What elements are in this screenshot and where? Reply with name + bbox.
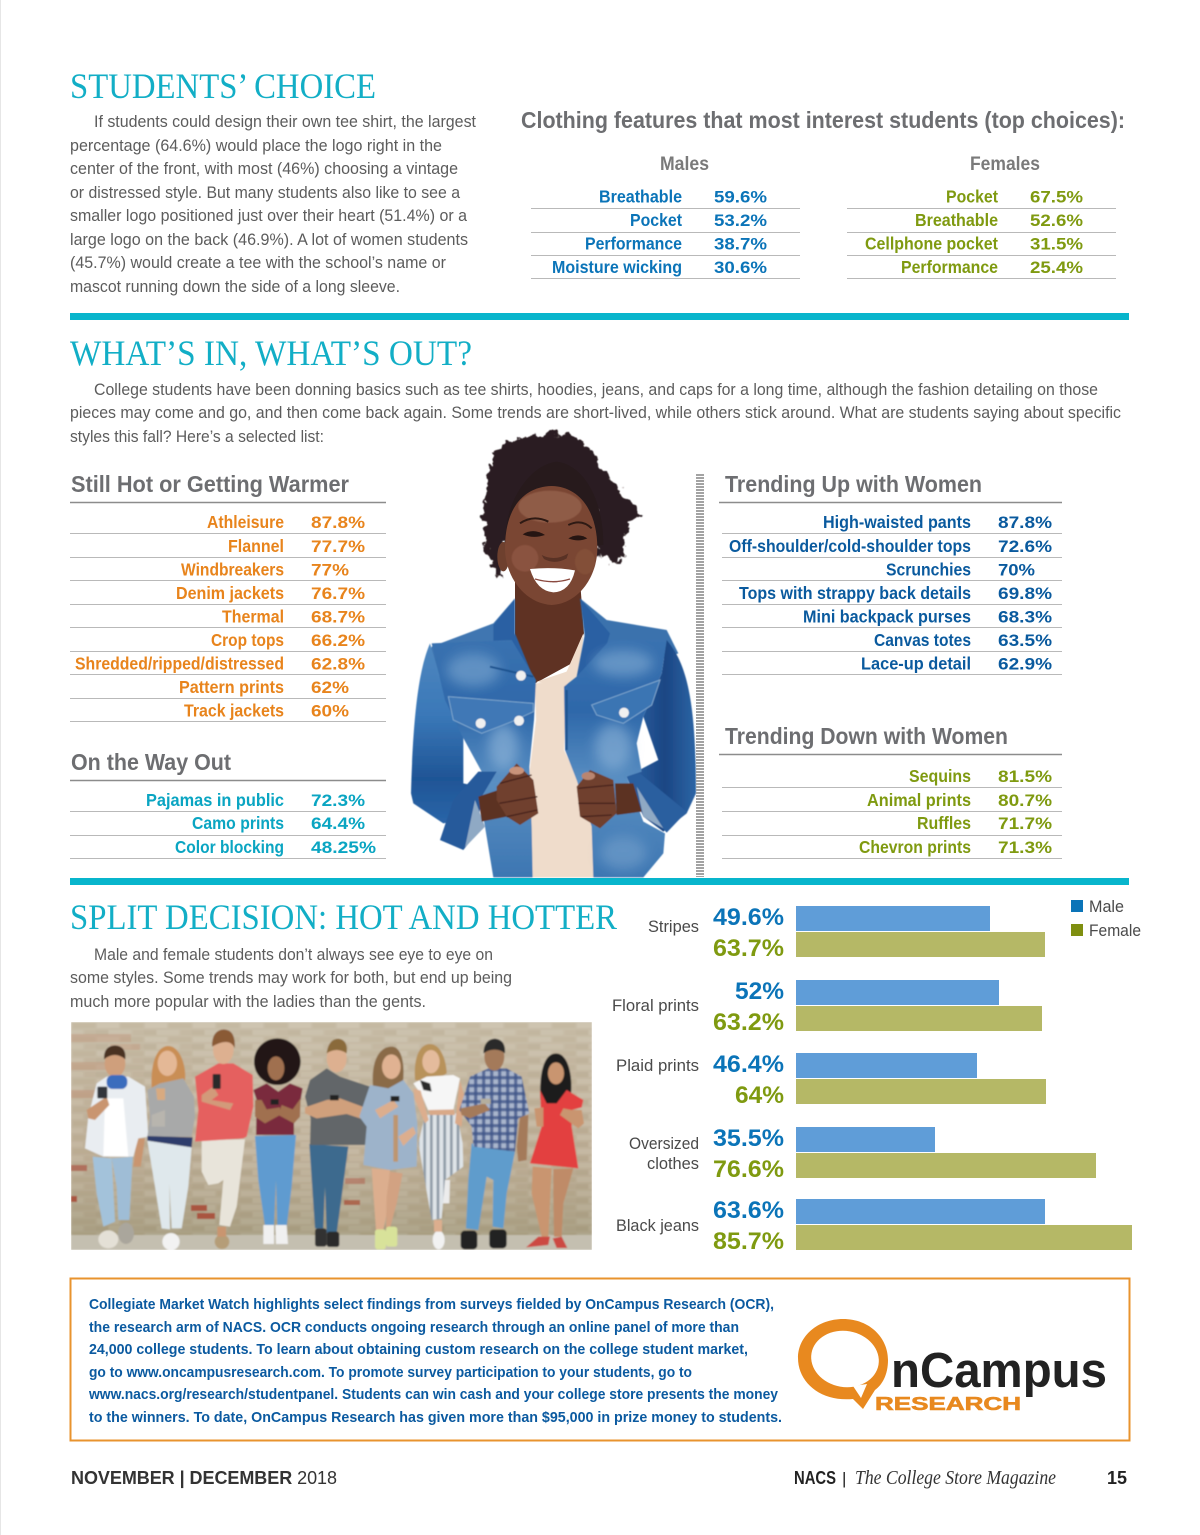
table: females: Females bbox=[970, 154, 1040, 175]
panel: students' choice bbox=[70, 66, 1125, 296]
table: still hot or getting warmer: Denim jackets bbox=[176, 583, 284, 603]
table: trending up with women: Canvas totes bbox=[874, 630, 971, 650]
table: females bbox=[847, 154, 1116, 278]
table: still hot or getting warmer: 77.7% bbox=[311, 537, 365, 556]
table: trending up with women: Tops with strappy back details bbox=[739, 583, 971, 603]
shirt bbox=[529, 660, 594, 877]
heading: split decision: SPLIT DECISION: HOT AND HOTTER bbox=[70, 897, 617, 937]
table: males: Moisture wicking bbox=[552, 257, 682, 277]
text block: trends intro: College students have been donning basics such as tee shirts, hoodies, jeans, and caps for a long time, although the fashion detailing on those bbox=[94, 381, 1098, 399]
table: still hot or getting warmer bbox=[70, 471, 386, 722]
table: on the way out: 72.3% bbox=[311, 791, 365, 810]
row: stripes: 49.6% bbox=[713, 904, 784, 931]
text block: students' choice intro: If students could design their own tee shirt, the largest bbox=[94, 113, 476, 131]
table: on the way out bbox=[70, 749, 386, 858]
row: oversized clothes: 35.5% bbox=[713, 1125, 784, 1152]
table: trending down with women: Animal prints bbox=[867, 790, 971, 810]
cuffs bbox=[440, 772, 497, 850]
table: males: Performance bbox=[585, 234, 682, 254]
table: trending up with women: Off-shoulder/cold-shoulder tops bbox=[729, 536, 971, 556]
table: trending up with women: Scrunchies bbox=[886, 560, 971, 580]
table: on the way out: Camo prints bbox=[192, 813, 284, 833]
row: floral prints bbox=[612, 978, 1042, 1036]
text block: split decision intro: much more popular with the ladies than the gents. bbox=[70, 993, 426, 1011]
table: females: Performance bbox=[901, 257, 998, 277]
logo: oncampus research: RESEARCH bbox=[875, 1394, 1021, 1414]
table: still hot or getting warmer: Track jackets bbox=[184, 700, 284, 720]
person 2 bbox=[147, 1141, 192, 1229]
striped vertical divider bbox=[696, 473, 704, 877]
row: floral prints: 52% bbox=[735, 978, 784, 1005]
footer: publication name: The College Store Magazine bbox=[855, 1467, 1056, 1489]
table: still hot or getting warmer: 62.8% bbox=[311, 654, 365, 674]
row: plaid prints: Plaid prints bbox=[616, 1057, 699, 1075]
table: still hot or getting warmer: 60% bbox=[311, 702, 349, 720]
text block: trends intro bbox=[70, 381, 1121, 446]
person 9 bbox=[532, 1167, 552, 1237]
logo: oncampus research: nCampus bbox=[891, 1344, 1107, 1398]
text block: about the survey: to the winners. To date, OnCampus Research has given more than $95,000 in prize money to students. bbox=[89, 1409, 782, 1426]
panel: what's in, what's out bbox=[70, 333, 1121, 877]
table: on the way out: Pajamas in public bbox=[146, 790, 284, 810]
bar chart: male vs female styles bbox=[612, 898, 1141, 1255]
text block: students' choice intro: (45.7%) would create a tee with the school’s name or bbox=[70, 254, 446, 272]
table: trending down with women: 80.7% bbox=[998, 791, 1052, 810]
table: females: 31.5% bbox=[1030, 234, 1083, 254]
text block: students' choice intro: smaller logo positioned just over their heart (51.4%) or a bbox=[70, 207, 468, 225]
table: still hot or getting warmer: Athleisure bbox=[207, 512, 284, 532]
right jacket body bbox=[564, 640, 667, 877]
text block: students' choice intro bbox=[70, 113, 476, 296]
table: males bbox=[531, 154, 800, 278]
table: males: 38.7% bbox=[714, 234, 767, 254]
row: black jeans: 85.7% bbox=[713, 1228, 784, 1255]
heading: clothing features: Clothing features that most interest students (top choices): bbox=[521, 107, 1125, 133]
table: trending up with women bbox=[719, 471, 1062, 674]
table: trending down with women: 71.3% bbox=[998, 838, 1052, 857]
table: still hot or getting warmer: Crop tops bbox=[211, 630, 284, 650]
table: still hot or getting warmer: 62% bbox=[311, 678, 349, 697]
table: males: 53.2% bbox=[714, 211, 767, 230]
text block: split decision intro: Male and female students don’t always see eye to eye on bbox=[94, 946, 493, 964]
table: on the way out: Color blocking bbox=[175, 837, 284, 857]
person 3 bbox=[202, 1139, 245, 1227]
left sleeve bbox=[411, 643, 478, 823]
row: floral prints: Floral prints bbox=[612, 997, 699, 1015]
text block: trends intro: styles this fall? Here’s a selected list: bbox=[70, 428, 324, 446]
person 4 bbox=[255, 1135, 296, 1227]
text block: trends intro: pieces may come and go, and then come back again. Some trends are short-lived, while others stick around. What are students saying about specific bbox=[70, 404, 1121, 422]
row: plaid prints bbox=[616, 1051, 1046, 1109]
text block: about the survey: www.nacs.org/research/studentpanel. Students can win cash and your college store presents the money bbox=[88, 1386, 779, 1403]
table: still hot or getting warmer: 76.7% bbox=[311, 584, 365, 603]
text block: about the survey: the research arm of NACS. OCR conducts ongoing research through an online panel of more than bbox=[89, 1319, 739, 1336]
table: still hot or getting warmer: Thermal bbox=[222, 606, 284, 626]
table: still hot or getting warmer: Shredded/ripped/distressed bbox=[75, 654, 284, 674]
table: trending up with women: 87.8% bbox=[998, 513, 1052, 532]
person 6 bbox=[372, 1168, 390, 1230]
row: black jeans: Black jeans bbox=[616, 1217, 699, 1235]
text block: about the survey: go to www.oncampusresearch.com. To promote survey participation to your students, go to bbox=[89, 1364, 692, 1381]
text block: students' choice intro: mascot running down the side of a long sleeve. bbox=[70, 278, 400, 296]
table: males: Breathable bbox=[599, 186, 682, 206]
text block: about the survey bbox=[88, 1296, 782, 1426]
face bbox=[497, 542, 509, 571]
footer: issue date: NOVEMBER | DECEMBER 2018 bbox=[71, 1468, 337, 1488]
table: trending down with women: 81.5% bbox=[998, 767, 1052, 786]
text block: split decision intro bbox=[70, 946, 512, 1011]
table: females: 52.6% bbox=[1030, 211, 1083, 230]
table: still hot or getting warmer: 68.7% bbox=[311, 608, 365, 626]
row: plaid prints: 64% bbox=[735, 1082, 784, 1109]
text block: students' choice intro: center of the front, with most (46%) choosing a vintage bbox=[70, 160, 458, 178]
text block: students' choice intro: large logo on the back (46.9%). A lot of women students bbox=[70, 231, 468, 249]
footer: publication name: NACS bbox=[794, 1468, 836, 1488]
right sleeve bbox=[627, 640, 696, 832]
left jacket body bbox=[432, 640, 536, 877]
buttons bbox=[516, 671, 526, 681]
footer bbox=[71, 1467, 1127, 1489]
text block: students' choice intro: or distressed style. But many students also like to see a bbox=[70, 184, 461, 202]
row: black jeans: 63.6% bbox=[713, 1197, 784, 1224]
table: on the way out: 64.4% bbox=[311, 814, 365, 833]
hands bbox=[478, 790, 507, 822]
panel: split decision bbox=[70, 897, 1141, 1255]
table: females: Pocket bbox=[946, 186, 998, 206]
table: on the way out: On the Way Out bbox=[71, 749, 231, 775]
row: stripes bbox=[648, 904, 1045, 962]
row: stripes: 63.7% bbox=[713, 935, 784, 962]
table: trending up with women: Trending Up with Women bbox=[725, 471, 982, 497]
table: trending up with women: 63.5% bbox=[998, 631, 1052, 650]
table: trending up with women: 70% bbox=[998, 560, 1035, 580]
table: females: Cellphone pocket bbox=[865, 234, 998, 254]
callout: oncampus research note bbox=[70, 1278, 1130, 1440]
table: trending up with women: 72.6% bbox=[998, 537, 1052, 556]
text block: split decision intro: some styles. Some trends may work for both, but end up being bbox=[70, 969, 512, 987]
row: black jeans bbox=[616, 1197, 1132, 1255]
table: males: 30.6% bbox=[714, 258, 767, 277]
text block: about the survey: 24,000 college students. To learn about obtaining custom research on the college student market, bbox=[89, 1341, 748, 1358]
table: trending down with women: Sequins bbox=[909, 766, 971, 786]
table: males: 59.6% bbox=[714, 188, 767, 206]
text block: about the survey: Collegiate Market Watch highlights select findings from surveys fielded by OnCampus Research (OCR), bbox=[89, 1296, 774, 1313]
table: trending down with women: 71.7% bbox=[998, 814, 1052, 833]
table: still hot or getting warmer: Pattern prints bbox=[179, 677, 284, 697]
table: trending down with women bbox=[719, 723, 1062, 858]
table: still hot or getting warmer: Flannel bbox=[228, 536, 284, 556]
footer: publication name: | bbox=[842, 1469, 846, 1488]
table: trending up with women: High-waisted pants bbox=[823, 512, 971, 532]
table: trending up with women: 62.9% bbox=[998, 654, 1052, 674]
legend: Female bbox=[1089, 922, 1141, 940]
legend: Male bbox=[1089, 898, 1124, 916]
table: still hot or getting warmer: Still Hot or Getting Warmer bbox=[71, 471, 349, 497]
person 8 bbox=[466, 1143, 515, 1230]
table: trending down with women: Ruffles bbox=[917, 813, 971, 833]
row: stripes: Stripes bbox=[648, 918, 699, 936]
row: oversized clothes: 76.6% bbox=[713, 1156, 784, 1183]
table: still hot or getting warmer: 87.8% bbox=[311, 513, 365, 532]
table: still hot or getting warmer: Windbreakers bbox=[181, 560, 284, 580]
table: trending down with women: Chevron prints bbox=[859, 837, 971, 857]
photo: smiling student in denim jacket bbox=[411, 434, 696, 877]
row: oversized clothes: Oversized bbox=[629, 1135, 699, 1153]
table: on the way out: 48.25% bbox=[311, 838, 376, 857]
table: trending up with women: Lace-up detail bbox=[861, 654, 971, 674]
table: still hot or getting warmer: 66.2% bbox=[311, 631, 365, 650]
table: females: Breathable bbox=[915, 210, 998, 230]
table: males: Males bbox=[660, 154, 709, 175]
table: trending up with women: Mini backpack purses bbox=[803, 606, 971, 626]
photo: group of students on phones against a brick wall bbox=[71, 1022, 592, 1250]
person 7 bbox=[441, 1180, 450, 1203]
table: trending up with women: 69.8% bbox=[998, 584, 1052, 603]
person 1 bbox=[93, 1157, 115, 1227]
row: oversized clothes: clothes bbox=[647, 1155, 699, 1173]
heading: what's in, what's out: WHAT’S IN, WHAT’S OUT? bbox=[70, 333, 472, 373]
row: floral prints: 63.2% bbox=[713, 1009, 784, 1036]
footer: publication name bbox=[794, 1467, 1056, 1489]
hair bbox=[483, 434, 642, 578]
heading: students' choice: STUDENTS’ CHOICE bbox=[70, 66, 376, 106]
table: trending down with women: Trending Down with Women bbox=[725, 723, 1008, 749]
footer: page number: 15 bbox=[1107, 1467, 1127, 1488]
logo: oncampus research bbox=[798, 1319, 1107, 1414]
table: trending up with women: 68.3% bbox=[998, 608, 1052, 626]
row: oversized clothes bbox=[629, 1125, 1096, 1183]
table: females: 25.4% bbox=[1030, 258, 1083, 277]
table: females: 67.5% bbox=[1030, 188, 1083, 206]
text block: students' choice intro: percentage (64.6%) would place the logo right in the bbox=[70, 137, 442, 155]
table: males: Pocket bbox=[630, 210, 682, 230]
legend bbox=[1071, 898, 1141, 940]
row: plaid prints: 46.4% bbox=[713, 1051, 784, 1078]
table: still hot or getting warmer: 77% bbox=[311, 560, 349, 580]
person 5 bbox=[309, 1144, 348, 1233]
